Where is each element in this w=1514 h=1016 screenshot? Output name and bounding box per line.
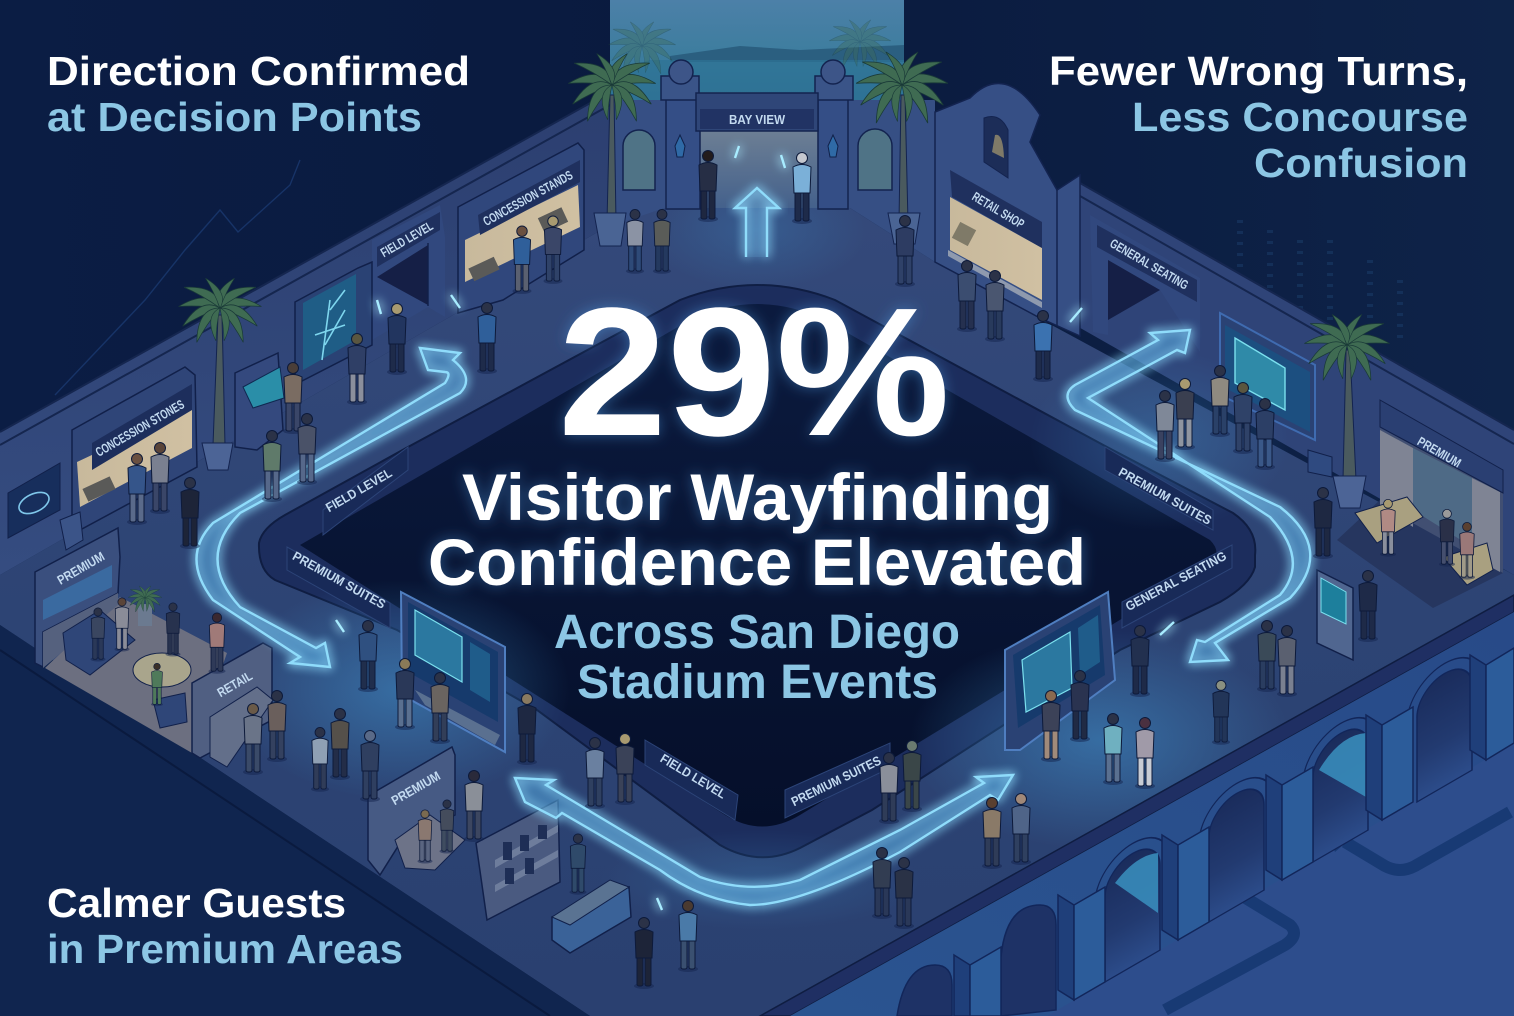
callout: top right: Less Concourse [1132,94,1468,140]
booth: retail: RETAIL [215,668,255,700]
arch map panels [1115,733,1366,913]
arrow: bottom curved [515,775,1013,905]
visitors and staff [90,150,1475,989]
lounge: left premium: PREMIUM [54,549,107,588]
lounge: right premium: PREMIUM [1415,434,1464,471]
booth: retail shop [948,170,1042,308]
concourse floor [0,208,1514,1016]
subhead: across san diego: Across San Diego [554,606,960,659]
kiosk: right [1317,570,1353,660]
faint chart lines top-left [55,160,300,395]
callout: top left: Direction Confirmed [47,48,470,94]
booth: premium seating [368,747,465,875]
screen: right concourse [1220,313,1315,440]
plate: premium suites right: PREMIUM SUITES [1116,464,1215,528]
callout: bottom left [47,880,403,972]
gate sign: BAY VIEW [729,112,786,127]
gate: general seating tunnel [1090,215,1200,352]
gate: field level tunnel [372,205,445,340]
shelf: merchandise [476,800,560,920]
lower-right ground [760,595,1514,1016]
faint data grid top-right [1240,220,1400,340]
palm: right concourse [1304,311,1390,508]
arcade: piers [954,648,1514,1016]
booth: premium seating: PREMIUM [389,768,443,808]
booth: retail [192,643,273,767]
headline: 29%: 29% [558,269,950,474]
gate: general seating tunnel: GENERAL SEATING [1107,236,1191,293]
staff glow wands [336,146,1174,910]
dark route arrow: lower floor corner [1165,883,1294,1010]
kiosk [235,353,284,450]
booth: retail shop: RETAIL SHOP [970,189,1027,232]
plate: premium suites bottom: PREMIUM SUITES [789,753,884,809]
plate: premium suites left: PREMIUM SUITES [290,548,389,612]
subhead: stadium events: Stadium Events [577,656,938,709]
callout: top right: Fewer Wrong Turns, [1049,48,1468,94]
lounge: right premium [1337,400,1503,608]
callout: top left: at Decision Points [47,94,422,140]
lower-left deck [0,625,590,1016]
plate: field level left: FIELD LEVEL [323,465,395,515]
lounge: left premium [35,528,227,753]
gate windows [623,129,892,190]
gate: field level tunnel: FIELD LEVEL [378,218,436,260]
callout: top right: Confusion [1254,140,1468,186]
wall rails [0,92,1514,445]
headline: visitor wayfinding: Visitor Wayfinding [462,460,1053,534]
booth: concession stands: CONCESSION STANDS [480,167,575,229]
callout: bottom left: in Premium Areas [47,926,403,972]
map display wall [295,262,372,382]
rounded rim of central atrium [259,285,1255,857]
callout: top right [1049,48,1468,186]
screen: south-west [401,592,505,752]
wall screen with logo [8,463,60,538]
arrow: left curved [196,348,466,667]
central atrium void [300,304,1216,826]
arrow: up toward bay view [735,188,779,257]
plate: premium suites right [1105,447,1215,530]
gate sign [700,109,814,129]
gate: bay view archway [610,60,935,262]
trash bin right [1308,450,1332,477]
palm: left concourse [179,275,261,470]
booth: concession stones [72,367,197,530]
callout: top left [47,48,470,140]
arrow: right curved [1068,330,1310,662]
arcade: arches [897,642,1482,1016]
palm: gate left [568,50,656,246]
trash bin [60,512,83,550]
screen: south-east [1005,592,1115,750]
booth: concession stones: CONCESSION STONES [93,396,187,460]
gate lanterns [675,135,838,157]
bell tower and mission wall [935,83,1080,336]
arcade: wall [790,612,1514,1016]
wall: right concourse wall [1075,180,1514,575]
plate: field level bottom [645,740,738,820]
headline: confidence elevated: Confidence Elevated [428,525,1086,599]
palm: gate right [856,48,948,244]
arcade: upper band [760,595,1514,1016]
wall: left concourse wall [0,92,610,575]
dark route arrow: lower floor pointer [1327,812,1510,870]
plate: field level bottom: FIELD LEVEL [658,751,729,802]
booth: concession stands [458,143,584,313]
plate: field level left [323,447,408,535]
callout: bottom left: Calmer Guests [47,880,346,926]
counter [552,880,631,953]
floor light pools [230,170,1290,930]
plate: general seating: GENERAL SEATING [1123,548,1229,614]
bay view backdrop [608,0,904,110]
